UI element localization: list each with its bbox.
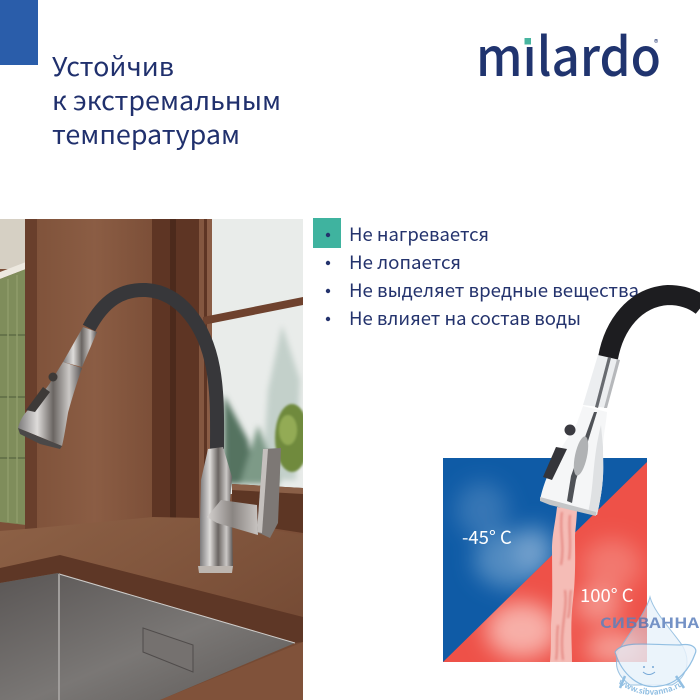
hot vapour — [486, 539, 645, 664]
window — [203, 219, 309, 533]
watermark: Sibvanna: www.sibvanna.ru — [619, 680, 682, 695]
countertop — [0, 517, 298, 646]
logo: milardo: milardo — [476, 16, 661, 92]
water stream — [550, 507, 577, 662]
watermark: Sibvanna: СИБВАННА — [600, 613, 700, 633]
wood window column — [152, 219, 207, 518]
green tiled wall — [0, 269, 26, 525]
faucet head — [18, 327, 97, 449]
bullet highlight — [313, 218, 341, 248]
sink — [0, 573, 295, 700]
faucet body — [198, 447, 281, 573]
logo: milardo: ® — [654, 36, 658, 49]
faucet hose — [89, 290, 217, 449]
product faucet — [540, 295, 700, 516]
watermark: Sibvanna — [600, 595, 700, 695]
feature list: Не влияет на состав воды — [349, 305, 581, 331]
title — [52, 47, 281, 152]
cold vapour — [456, 482, 554, 588]
title: к экстремальным — [52, 81, 281, 118]
counter corner — [160, 642, 303, 700]
window sill — [232, 484, 303, 533]
wood wall panel — [58, 219, 122, 526]
counter front edge — [0, 555, 303, 643]
feature list — [326, 221, 639, 331]
label cold: -45° C — [462, 524, 512, 550]
chrome collar — [583, 355, 620, 408]
chrome head — [540, 406, 607, 515]
switch knob — [564, 424, 576, 436]
feature list: Не лопается — [349, 249, 461, 275]
corner accent — [0, 0, 38, 65]
title: Устойчив — [52, 47, 174, 84]
window frame bar — [203, 297, 303, 325]
title: температурам — [52, 115, 240, 152]
feature list: Не выделяет вредные вещества — [349, 277, 639, 303]
left cream wall — [0, 219, 26, 269]
potted plant — [275, 404, 309, 472]
label hot: 100° C — [580, 582, 634, 608]
black hose — [608, 295, 700, 358]
photo: kitchen faucet — [0, 219, 309, 700]
feature list: Не нагревается — [349, 221, 489, 247]
temperature panel — [443, 458, 647, 664]
spray button — [543, 447, 567, 480]
